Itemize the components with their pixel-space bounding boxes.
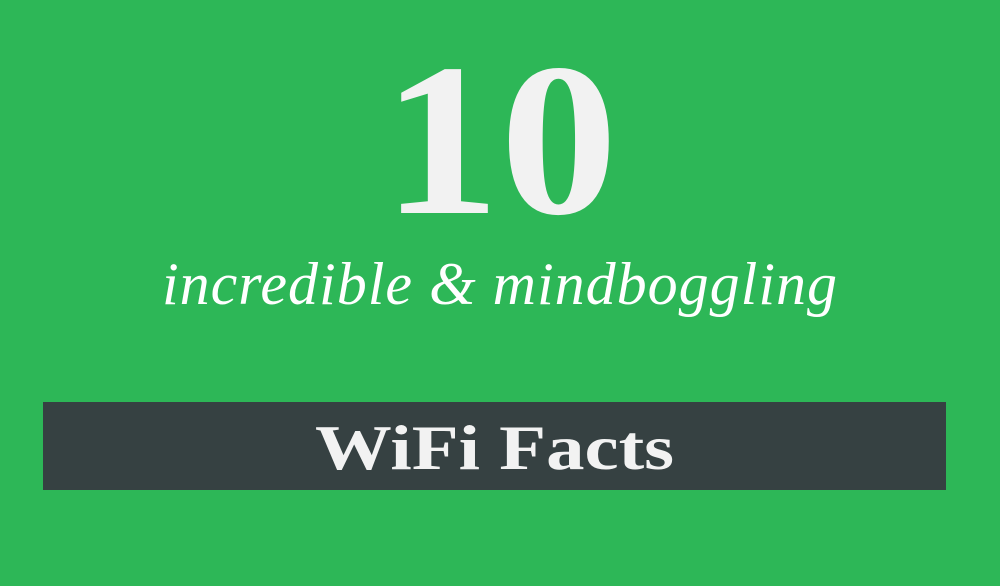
title banner <box>43 402 946 490</box>
title text: WiFi Facts <box>315 412 674 483</box>
script subtitle: incredible & mindboggling <box>162 251 838 317</box>
number 10: 10 <box>382 20 618 261</box>
